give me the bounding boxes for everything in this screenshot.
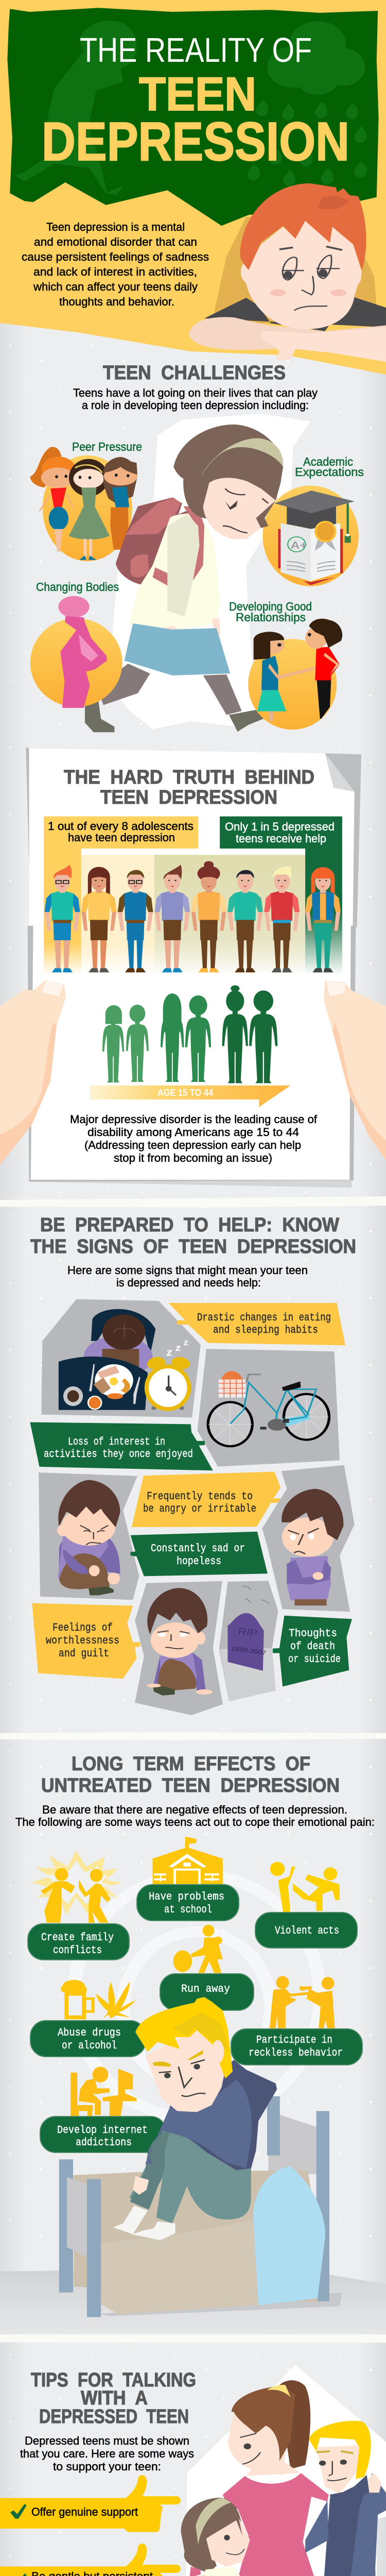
panel: eating and sleeping illustration [41,1299,201,1417]
disability text: disability among Americans age 15 to 44 [87,1126,299,1139]
stat: 1 in 5: Only 1 in 5 depressed [225,820,335,833]
stat: 1 out of 8: have teen depression [68,831,175,844]
illustration: sad boy resting on arms [189,183,386,362]
pill: reckless behavior: reckless behavior [249,2047,343,2059]
intro text: to support your teen: [53,2460,161,2473]
panel: eating and sleeping illustration: z [166,1347,172,1358]
tag: thoughts of death: of death [290,1641,335,1653]
white splash background [108,414,310,729]
label: academic expectations: Expectations [295,465,364,479]
pill: have problems at school: Have problems [149,1891,224,1903]
heading: LONG TERM EFFECTS OF [72,1753,310,1775]
tag: sad or hopeless: Constantly sad or [151,1543,245,1555]
intro text: a role in developing teen depression including: [82,399,309,412]
heading [31,2369,196,2428]
illustration: boy on bed [59,1997,342,2317]
tag: worthlessness [32,1603,141,1679]
stat: 1 in 5: teens receive help [236,832,326,845]
tag: angry or irritable [132,1472,280,1527]
tag: angry or irritable: Frequently tends to [147,1491,253,1503]
panel: gravestone: RIP [237,1626,258,1639]
pill: reckless behavior: Participate in [256,2035,332,2046]
pill: create family conflicts [28,1924,129,1960]
panel: angry boy [262,1465,355,1612]
tip: offer genuine support: Offer genuine support [31,2505,138,2518]
tag: thoughts of death [273,1616,352,1687]
label: academic expectations [295,455,364,479]
intro text: thoughts and behavior. [59,295,174,308]
intro text: that you care. Here are some ways [20,2447,194,2460]
tag: loss of interest: Loss of interest in [68,1436,165,1448]
title [42,31,349,172]
label: changing bodies: Changing Bodies [36,580,119,594]
pill: abuse drugs or alcohol: Abuse drugs [58,2027,121,2039]
heading [41,1753,340,1797]
label: developing good relationships: Relationships [236,611,306,624]
pill: create family conflicts: conflicts [53,1945,102,1957]
torn divider [0,2334,386,2343]
floor [0,2270,386,2334]
icon: school building [153,1837,223,1884]
panel: long term effects [0,1753,386,2334]
heading: THE HARD TRUTH BEHIND [64,767,314,788]
tag: angry or irritable: be angry or irritable [143,1503,256,1515]
tag: sad or hopeless [130,1532,268,1576]
pill: reckless behavior [231,2029,362,2065]
paper sheet [26,748,361,1188]
pill: develop internet addictions: addictions [76,2137,132,2149]
illustration: sad girl with backpack [85,425,283,732]
title: THE REALITY OF [80,31,312,70]
tag: worthlessness: and guilt [59,1648,109,1660]
heading: UNTREATED TEEN DEPRESSION [41,1775,340,1797]
label: peer pressure: Peer Pressure [72,440,142,453]
disability text: (Addressing teen depression early can help [84,1139,301,1151]
pill: develop internet addictions [40,2116,166,2153]
pill: abuse drugs or alcohol: or alcohol [62,2040,117,2052]
intro text [15,1803,375,1828]
green chalkboard with silhouettes [7,8,379,226]
tip: be gentle [0,2544,181,2576]
intro text: and emotional disorder that can [34,235,197,248]
icon: family conflict [31,1851,122,1923]
panel: header [0,0,386,375]
intro text [67,1264,308,1289]
panel: eating and sleeping illustration: z [183,1338,188,1347]
intro text: Here are some signs that might mean your teen [67,1264,308,1277]
intro text: cause persistent feelings of sadness [22,250,209,263]
disability text: Major depressive disorder is the leading cause of [70,1113,318,1126]
tag: eating and sleeping: Drastic changes in eating [197,1312,331,1324]
heading: TIPS FOR TALKING [31,2369,196,2391]
tag: loss of interest [30,1422,213,1470]
pill: violent acts [255,1912,357,1948]
arrow: age band: AGE 15 TO 44 [157,1088,213,1098]
pill: run away: Run away [181,1984,230,1995]
intro text [73,386,318,412]
figures: age silhouettes [102,986,277,1083]
panel: hard truth paper [0,748,386,1188]
pill: have problems at school [137,1885,239,1921]
icon: internet addiction [71,2066,136,2117]
tag: loss of interest: activities they once enjoyed [44,1449,193,1461]
icon: changing body silhouette [30,596,122,708]
intro text: Depressed teens must be shown [25,2434,189,2447]
intro text [20,2434,194,2473]
icon: two teens shaking hands [248,619,342,730]
yellow header background [0,0,386,375]
pill: create family conflicts: Create family [41,1932,114,1944]
panel: gravestone: 1990-2007 [231,1645,267,1656]
arrow: age band [90,1086,290,1107]
tag: eating and sleeping [169,1303,345,1345]
title: TEEN [139,68,256,121]
heading: WITH A [81,2387,148,2409]
pill: abuse drugs or alcohol [30,2021,146,2057]
heading: TEEN CHALLENGES [103,362,286,384]
white swirl background [74,1874,320,2119]
panel: guilty boy [135,1581,223,1715]
icon: graduation cap and book [262,486,359,586]
pill: run away [160,1974,254,2010]
icon: run away [173,1925,223,1973]
pill: have problems at school: at school [164,1904,212,1916]
intro text: The following are some ways teens act out to cope their emotional pain: [15,1816,375,1828]
stat: 1 out of 8 [48,820,194,844]
heading [30,1214,356,1258]
stat: 1 in 5 [225,820,335,845]
icon: beer and leaf [61,1980,136,2020]
label: developing good relationships: Developing Good [229,600,312,613]
panel: signs of depression [30,1214,356,1715]
intro text: is depressed and needs help: [116,1276,261,1289]
pill: violent acts: Violent acts [275,1925,339,1937]
hands holding paper [0,980,386,1165]
panel: teen challenges [30,362,364,732]
panel: gravestone [219,1581,278,1701]
tag: worthlessness: Feelings of [52,1622,113,1634]
white triangle background [185,2365,386,2576]
torn divider [0,1732,386,1740]
stat bars behind figures [44,817,342,975]
tag: eating and sleeping: and sleeping habits [213,1325,318,1336]
tag: sad or hopeless: hopeless [177,1556,221,1568]
intro text: and lack of interest in activities, [33,265,197,278]
heading: TEEN DEPRESSION [100,787,277,808]
label: academic expectations: Academic [303,455,353,468]
disability text [70,1113,318,1164]
panel: bicycle illustration [198,1349,340,1467]
heading [64,767,314,808]
tip: offer genuine support [0,2475,181,2532]
tag: thoughts of death: or suicide [288,1654,341,1666]
intro text: Be aware that there are negative effects of teen depression. [42,1803,347,1816]
icon: violent acts [270,1862,340,1912]
figures: eight teens [45,861,341,972]
icon: three peers [30,447,137,561]
intro text: Teens have a lot going on their lives that can play [73,386,318,399]
heading: BE PREPARED TO HELP: KNOW [40,1214,339,1236]
panel: hopeless boy [39,1472,139,1600]
intro text: Teen depression is a mental [46,221,185,233]
panel: tips for talking [0,2365,386,2576]
torn divider [0,1196,386,1208]
label: developing good relationships [229,600,312,624]
intro text: which can affect your teens daily [33,280,198,293]
pill: develop internet addictions: Develop internet [57,2125,148,2137]
panel: eating and sleeping illustration: z [176,1343,181,1353]
icon: reckless behavior [270,1976,335,2028]
icon: graduation cap and book: A+ [290,539,307,551]
tag: worthlessness: worthlessness [46,1635,119,1647]
intro text [22,221,209,308]
stat: 1 out of 8: 1 out of every 8 adolescents [48,820,194,833]
heading: THE SIGNS OF TEEN DEPRESSION [30,1236,356,1258]
tag: thoughts of death: Thoughts [289,1628,337,1640]
illustration: family hug [181,2380,386,2576]
disability text: stop it from becoming an issue) [114,1151,272,1164]
heading: DEPRESSED TEEN [39,2406,189,2428]
